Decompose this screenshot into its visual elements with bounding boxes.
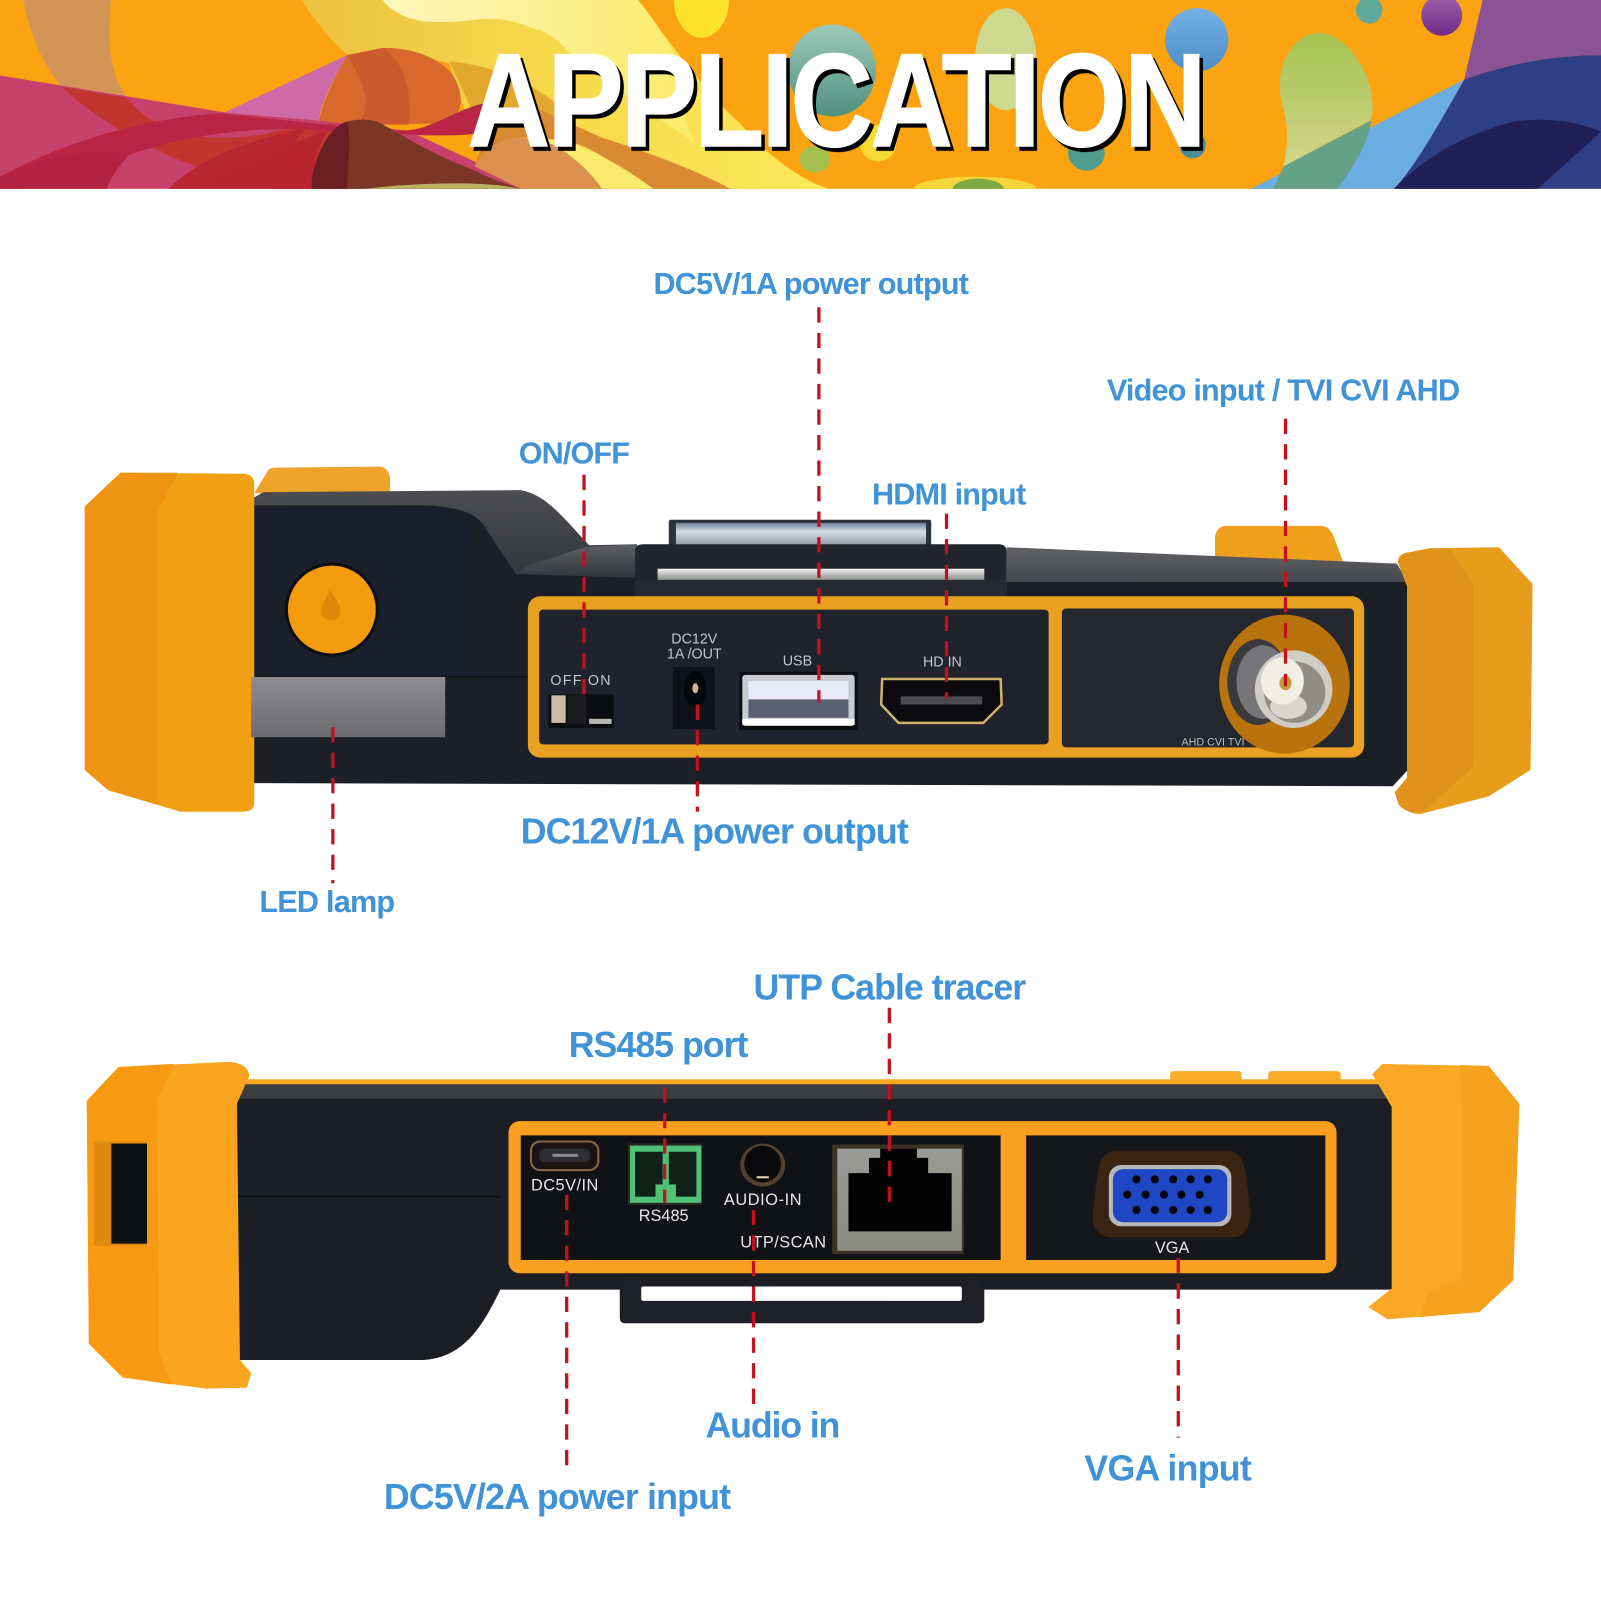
icon: DC jack: [673, 667, 715, 729]
LED lamp window: [251, 677, 445, 737]
HDMI label: HD IN: [923, 655, 962, 671]
title: APPLICATION: [468, 27, 1204, 175]
icon: left bumper: [85, 473, 254, 812]
VGA label: VGA: [1155, 1239, 1190, 1257]
label: VGA input: VGA input: [1084, 1449, 1252, 1489]
USB label: USB: [783, 654, 812, 670]
icon: HDMI port: [881, 679, 1002, 723]
label: video input: Video input / TVI CVI AHD: [1107, 373, 1460, 407]
switch label: OFF ON: [550, 673, 611, 689]
label: DC5V/1A power output: DC5V/1A power output: [653, 267, 969, 301]
side seam: [237, 1196, 500, 1198]
icon: right bumper: [1395, 547, 1533, 814]
label: DC5V/2A power input: DC5V/2A power input: [384, 1477, 731, 1517]
icon: micro USB port: [531, 1142, 598, 1170]
UTP label: UTP/SCAN: [740, 1234, 826, 1252]
icon: rear stand: [669, 520, 931, 550]
icon: USB port: [739, 672, 858, 730]
panel: top device view: [85, 467, 1533, 814]
icon: left bumper: [87, 1062, 251, 1389]
icon: right bumper: [1368, 1064, 1519, 1319]
grey shoulder: [516, 544, 637, 578]
banner header: [0, 0, 1601, 201]
handle: [635, 544, 1007, 596]
DC12V label: DC12V: [671, 631, 718, 647]
VGA pin holes: [1123, 1175, 1212, 1214]
device top strip: [245, 1079, 1378, 1085]
AUDIO-IN label: AUDIO-IN: [724, 1191, 802, 1209]
panel: ports frame: [528, 596, 1364, 758]
panel: ports frame: [508, 1121, 1337, 1273]
upper block: [238, 505, 476, 677]
label: audio in: Audio in: [706, 1406, 840, 1446]
icon: top buttons: [1170, 1071, 1341, 1085]
device body: [237, 1084, 1394, 1360]
icon: right rear tab: [1215, 526, 1344, 564]
label: DC12V/1A power output: DC12V/1A power output: [521, 811, 909, 851]
icon: audio jack: [740, 1144, 785, 1186]
1A OUT label: 1A /OUT: [667, 647, 722, 663]
leader lines: [333, 307, 1285, 1470]
label: UTP cable tracer: UTP Cable tracer: [754, 968, 1026, 1008]
grey top wedge: [249, 490, 637, 613]
panel: bottom device view: [87, 1062, 1519, 1389]
device top surface: [1007, 547, 1407, 613]
label: LED lamp: LED lamp: [259, 885, 395, 919]
icon: VGA port: [1093, 1151, 1251, 1238]
device front body: [238, 505, 1419, 786]
AHD label: AHD CVI TVI: [1182, 736, 1244, 748]
icon: LED button: [285, 563, 379, 657]
icon: RJ45 port: [832, 1145, 964, 1254]
icon: back tab left: [254, 467, 390, 495]
icon: BNC connector: [1219, 615, 1350, 754]
label: RS485 port: RS485 port: [569, 1025, 749, 1065]
label: on/off: ON/OFF: [519, 437, 630, 471]
RS485 label: RS485: [639, 1207, 689, 1225]
label: HDMI input: HDMI input: [872, 477, 1026, 511]
icon: RS485 terminal: [628, 1144, 701, 1205]
DC5V label: DC5V/IN: [531, 1177, 598, 1195]
handle: [620, 1274, 984, 1323]
icon: power switch: [548, 694, 614, 728]
grey upper band: [237, 1084, 1394, 1099]
